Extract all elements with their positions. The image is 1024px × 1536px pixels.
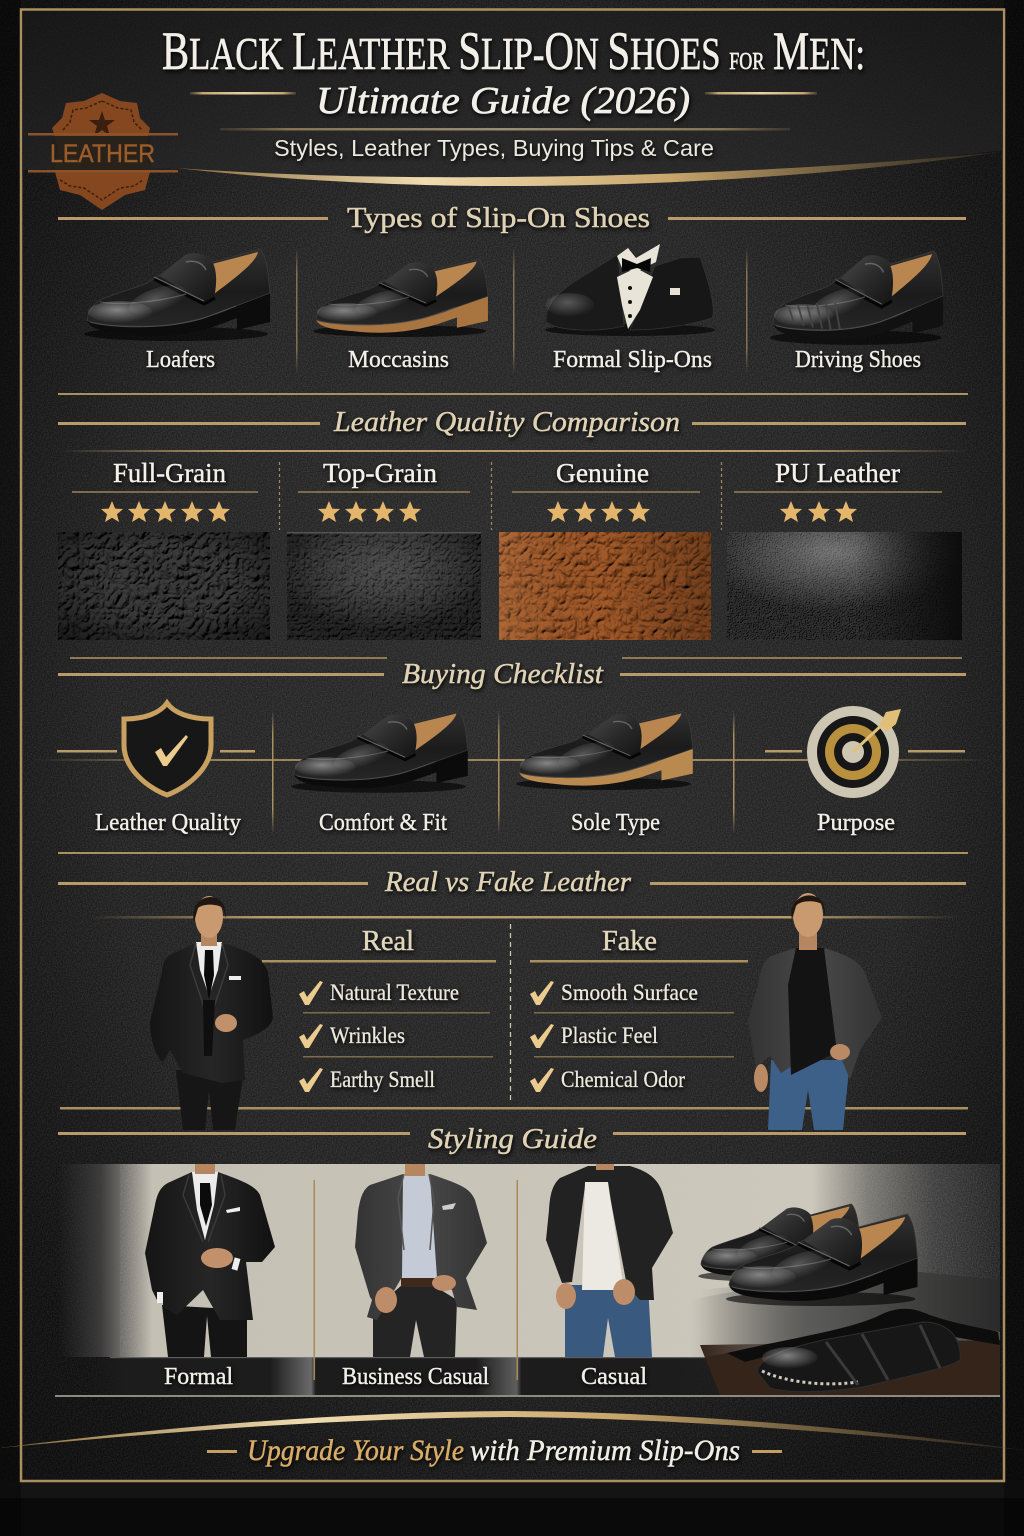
footer text: with Premium Slip-Ons bbox=[470, 1434, 740, 1467]
column: real bbox=[262, 926, 496, 1092]
panel: footer call to action bbox=[0, 1411, 1024, 1467]
column: pu leather: PU Leather bbox=[775, 458, 900, 488]
heading: Styling Guide bbox=[428, 1123, 597, 1155]
panel: leather quality comparison bbox=[58, 406, 968, 640]
labels: Business Casual bbox=[342, 1364, 489, 1390]
column: top-grain bbox=[287, 458, 481, 640]
column: full-grain: Full-Grain bbox=[113, 458, 226, 488]
subtitle rules bbox=[190, 92, 817, 130]
labels: Moccasins bbox=[348, 347, 449, 373]
icon: moccasin bbox=[313, 259, 488, 337]
column: real: Wrinkles bbox=[330, 1023, 405, 1048]
labels: Purpose bbox=[817, 810, 895, 836]
labels: Formal bbox=[164, 1364, 233, 1390]
heading: Buying Checklist bbox=[402, 658, 604, 690]
column: top-grain: Top-Grain bbox=[323, 458, 438, 488]
labels: Driving Shoes bbox=[795, 347, 921, 373]
labels: Comfort & Fit bbox=[319, 810, 447, 836]
rules bbox=[35, 710, 990, 834]
panel: styling guide bbox=[55, 1123, 1000, 1397]
column: fake: Fake bbox=[602, 926, 657, 957]
tagline: Styles, Leather Types, Buying Tips & Care bbox=[274, 135, 714, 161]
icon: sole shoe bbox=[516, 711, 693, 790]
panel: types of slip-on shoes bbox=[58, 202, 966, 374]
labels: Loafers bbox=[146, 347, 215, 373]
icon: comfort shoe bbox=[291, 711, 468, 793]
column: real: Natural Texture bbox=[330, 980, 459, 1005]
icon: target bbox=[807, 706, 901, 798]
leather badge: LEATHER bbox=[50, 140, 155, 168]
column: fake: Smooth Surface bbox=[561, 980, 698, 1005]
labels: Casual bbox=[581, 1364, 647, 1390]
heading: Leather Quality Comparison bbox=[333, 406, 680, 438]
dividers bbox=[296, 247, 748, 374]
figure: business casual bbox=[355, 1164, 487, 1357]
labels: Leather Quality bbox=[95, 810, 241, 836]
title: BLACK LEATHER SLIP-ON SHOES FOR MEN: bbox=[162, 21, 865, 81]
icon: loafer bbox=[84, 249, 270, 341]
figure: man in blazer and jeans bbox=[748, 893, 882, 1130]
shoes and cloth bbox=[698, 1204, 1000, 1395]
heading: Real vs Fake Leather bbox=[384, 866, 632, 898]
panel: real vs fake leather bbox=[58, 866, 968, 1130]
figure: formal bbox=[145, 1164, 275, 1357]
icon: shield bbox=[124, 703, 211, 795]
column: genuine: Genuine bbox=[556, 458, 649, 488]
labels: Formal Slip-Ons bbox=[553, 347, 712, 373]
figure: man in suit bbox=[150, 896, 273, 1130]
labels bbox=[164, 1364, 647, 1390]
panel: buying checklist bbox=[35, 657, 990, 836]
header band bbox=[22, 11, 1003, 181]
heading bbox=[58, 202, 966, 234]
heading bbox=[58, 1123, 966, 1155]
footer text bbox=[207, 1434, 782, 1467]
column: real: Earthy Smell bbox=[330, 1067, 435, 1092]
heading: Types of Slip-On Shoes bbox=[347, 202, 650, 234]
figure: casual bbox=[546, 1164, 673, 1357]
column: genuine bbox=[499, 458, 711, 640]
column: real: Real bbox=[362, 926, 414, 957]
panel: header bbox=[22, 11, 1003, 210]
leather badge bbox=[28, 93, 178, 210]
column: fake: Plastic Feel bbox=[561, 1023, 658, 1048]
column: fake bbox=[530, 926, 748, 1092]
icon: formal slip-on with tuxedo bbox=[545, 244, 715, 336]
gold arc bbox=[0, 1411, 1024, 1450]
labels: Sole Type bbox=[571, 810, 660, 836]
subtitle: Ultimate Guide (2026) bbox=[316, 80, 690, 122]
icon: driving shoe bbox=[770, 251, 943, 345]
heading bbox=[58, 657, 966, 690]
gold swoosh bbox=[176, 152, 1000, 186]
labels bbox=[95, 810, 895, 836]
labels bbox=[146, 347, 921, 373]
heading bbox=[58, 866, 966, 898]
dividers bbox=[314, 1180, 518, 1380]
column: pu leather bbox=[727, 458, 962, 640]
heading bbox=[58, 406, 966, 438]
photo backdrop bbox=[58, 1164, 1000, 1395]
column: fake: Chemical Odor bbox=[561, 1067, 685, 1092]
column: full-grain bbox=[58, 458, 270, 640]
footer text: Upgrade Your Style bbox=[247, 1434, 464, 1467]
